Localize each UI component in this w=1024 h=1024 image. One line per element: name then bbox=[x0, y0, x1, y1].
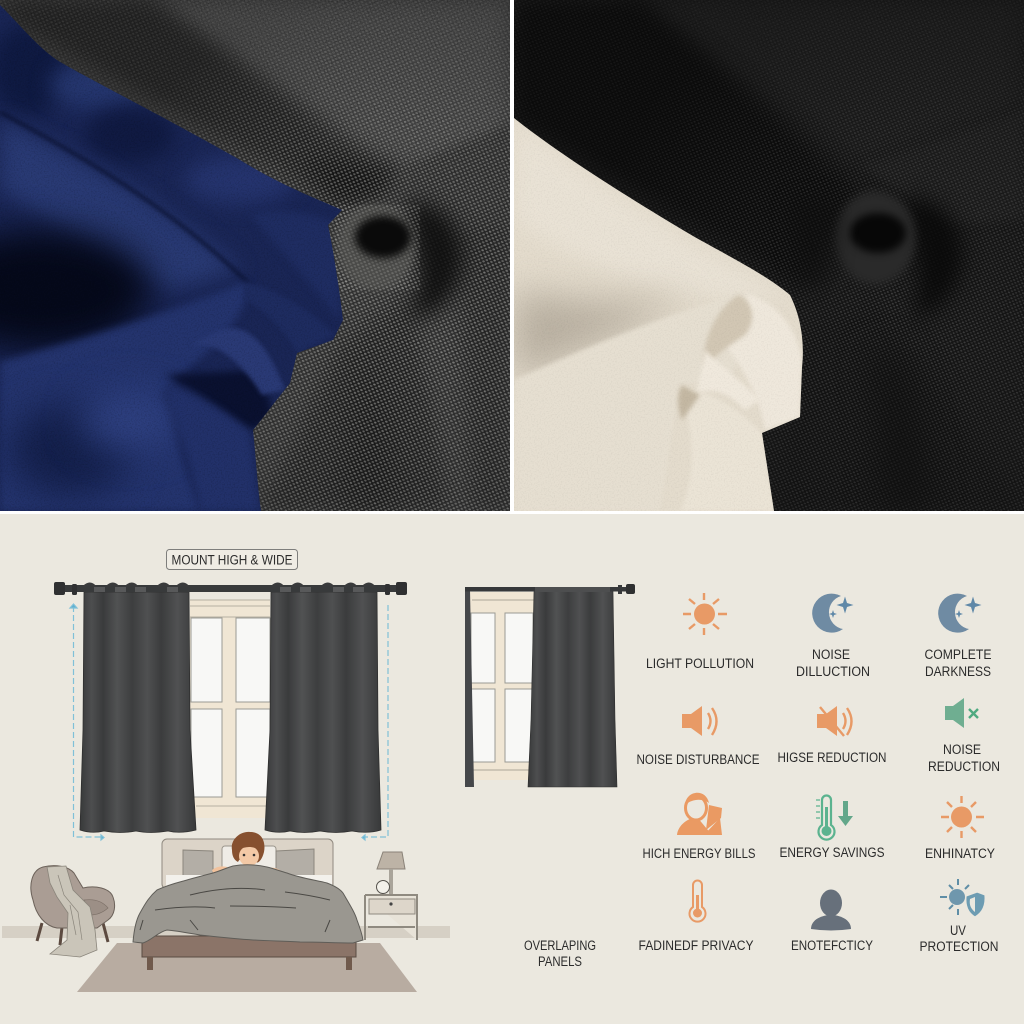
icon: moon with stars bbox=[938, 594, 982, 633]
illustration: second window narrow left panel bbox=[465, 590, 474, 787]
label: noise reduction: REDUCTION bbox=[928, 759, 1000, 774]
icon: stressed person bbox=[677, 793, 722, 835]
icon: moon with stars bbox=[812, 594, 854, 633]
illustration: main curtain rod with grommets bbox=[54, 582, 407, 595]
illustration: person in bed bbox=[212, 832, 285, 875]
label: noise reduction: NOISE bbox=[943, 742, 981, 757]
icon: thermometer with down arrow bbox=[816, 796, 853, 840]
icon: green speaker with x bbox=[945, 698, 978, 728]
label: mount high and wide bbox=[166, 550, 298, 570]
icon: sun bbox=[941, 796, 984, 838]
label: noise disturbance: NOISE DISTURBANCE bbox=[636, 752, 760, 767]
label: overlapping panels: OVERLAPING bbox=[524, 938, 596, 953]
label: complete darkness: COMPLETE bbox=[924, 647, 992, 662]
label: light pollution: LIGHT POLLUTION bbox=[646, 656, 754, 671]
illustration: right main curtain bbox=[265, 592, 381, 832]
illustration: second window with overlapping panel bbox=[470, 592, 536, 780]
label: noise reduction bbox=[928, 742, 1000, 774]
grey fabric knot bbox=[335, 200, 463, 320]
label: mount high and wide: MOUNT HIGH & WIDE bbox=[172, 552, 292, 568]
label: noise dilution bbox=[796, 647, 870, 679]
label: noise dilution: DILLUCTION bbox=[796, 664, 870, 679]
illustration: armchair with throw bbox=[31, 866, 115, 957]
label: enotefcticy: ENOTEFCTICY bbox=[791, 938, 873, 953]
illustration: headboard bbox=[162, 839, 333, 889]
panel: navy and grey fabric photo bbox=[0, 0, 510, 511]
label: overlapping panels: PANELS bbox=[538, 954, 582, 969]
panel: lower cream background bbox=[0, 514, 1024, 1024]
label: complete darkness: DARKNESS bbox=[925, 664, 991, 679]
label: energy savings: ENERGY SAVINGS bbox=[780, 845, 884, 860]
label: enhinatcy: ENHINATCY bbox=[925, 846, 995, 861]
illustration: nightstand with lamp and clock bbox=[365, 852, 417, 940]
icon: muted speaker bbox=[817, 706, 852, 736]
grey fabric weave texture bbox=[0, 0, 510, 511]
label: uv protection: PROTECTION bbox=[920, 939, 998, 954]
illustration: baseboard bbox=[2, 926, 450, 938]
label: higse reduction: HIGSE REDUCTION bbox=[778, 750, 886, 765]
illustration: duvet bbox=[133, 865, 363, 943]
navy fabric bbox=[0, 0, 350, 511]
label: uv protection: UV bbox=[950, 923, 966, 938]
illustration: rug bbox=[77, 943, 417, 992]
icon: person bbox=[811, 890, 851, 930]
icon: thermometer bbox=[690, 880, 706, 922]
label: uv protection bbox=[920, 923, 998, 954]
label: complete darkness bbox=[924, 647, 992, 679]
black fabric weave texture bbox=[514, 0, 1024, 511]
illustration: pillows bbox=[166, 846, 332, 887]
arrow: right measure bbox=[362, 605, 388, 840]
illustration: window behind main curtains bbox=[190, 600, 270, 818]
illustration: second window wide panel bbox=[528, 591, 617, 787]
icon: sun with shield bbox=[940, 879, 985, 917]
label: faded privacy: FADINEDF PRIVACY bbox=[638, 938, 754, 953]
illustration: bed frame bbox=[142, 936, 356, 970]
label: high energy bills: HICH ENERGY BILLS bbox=[642, 846, 756, 861]
icon: speaker bbox=[682, 706, 716, 736]
label: noise dilution: NOISE bbox=[812, 647, 850, 662]
panel: cream and black fabric photo bbox=[514, 0, 1024, 511]
label: overlapping panels bbox=[524, 938, 596, 969]
icon: sun bbox=[683, 593, 727, 635]
cream fabric bbox=[514, 118, 803, 511]
illustration: second curtain rod bbox=[465, 584, 635, 594]
black fabric knot bbox=[790, 192, 962, 320]
illustration: left main curtain bbox=[80, 592, 196, 832]
arrow: left measure bbox=[70, 604, 104, 840]
